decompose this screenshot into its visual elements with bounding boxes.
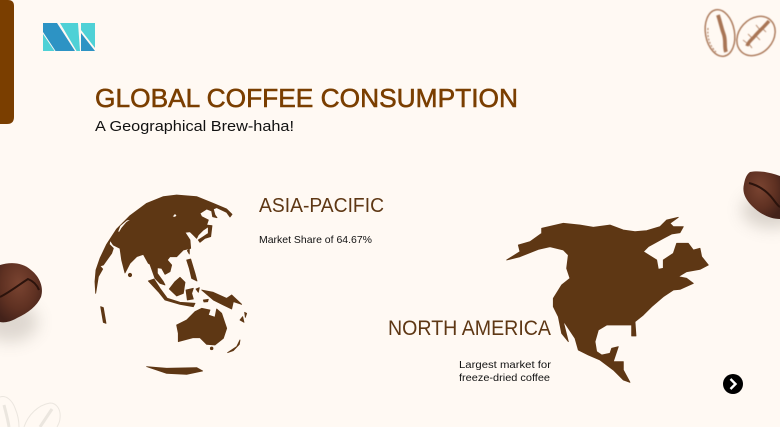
text: North America description: freeze-dried coffee: [459, 372, 550, 384]
map: North America: [507, 217, 708, 382]
text: North America description: [459, 359, 552, 384]
logo: [43, 23, 95, 51]
left accent bar: [0, 0, 14, 124]
icon: coffee bean right: [742, 171, 780, 228]
icon: sketched coffee beans: [702, 7, 780, 63]
heading: Asia-Pacific: ASIA-PACIFIC: [259, 195, 384, 217]
map: Asia-Pacific globe: [95, 195, 247, 374]
icon: next arrow button: [723, 374, 743, 394]
icon: coffee bean left: [0, 263, 42, 342]
subtitle: A Geographical Brew-haha!: [95, 118, 294, 135]
title: GLOBAL COFFEE CONSUMPTION: [95, 83, 518, 113]
text: North America description: Largest market for: [459, 359, 552, 371]
heading: North America: NORTH AMERICA: [388, 317, 551, 340]
text: Asia-Pacific market share: Market Share of 64.67%: [259, 234, 372, 246]
icon: faded sketched beans: [0, 397, 60, 427]
